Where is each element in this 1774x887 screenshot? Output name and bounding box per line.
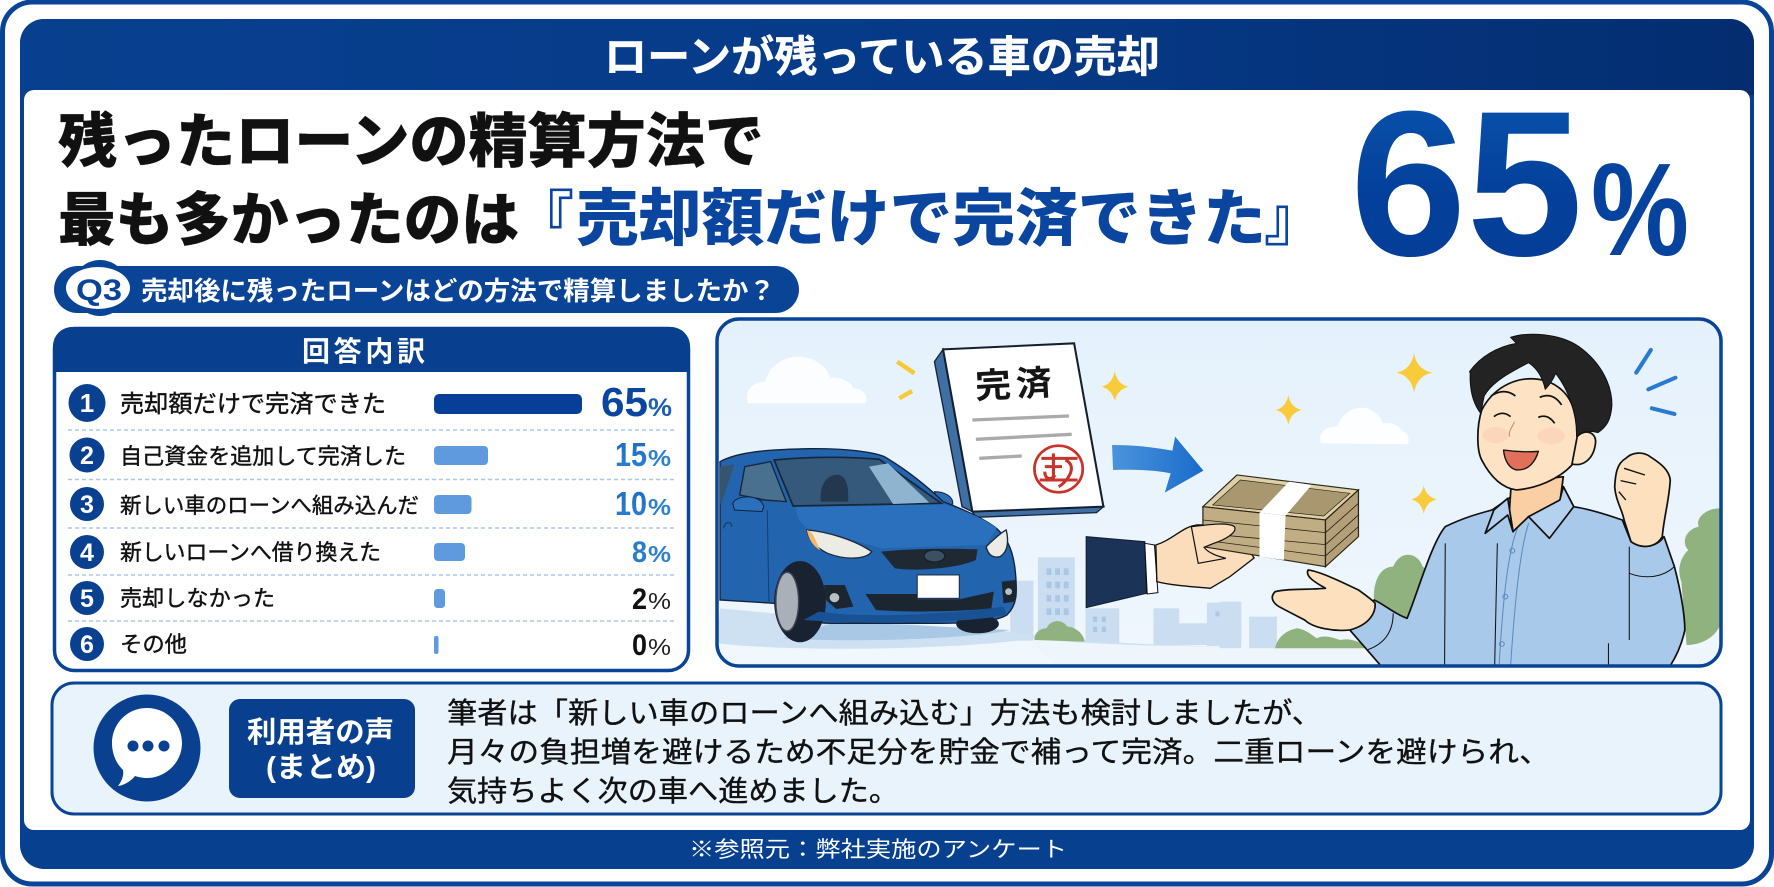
fist <box>1615 453 1670 546</box>
cloud left <box>747 357 866 403</box>
headlights <box>807 530 872 558</box>
row 4 <box>70 535 671 569</box>
footer source note: ※参照元：弊社実施のアンケート <box>689 837 1067 862</box>
grille <box>881 549 978 570</box>
row 6 <box>70 627 671 662</box>
question text: 売却後に残ったローンはどの方法で精算しましたか？ <box>141 276 775 306</box>
row 5: 売却しなかった <box>120 586 275 611</box>
question badge: Q3 <box>76 274 122 307</box>
sparkles <box>1276 353 1437 514</box>
shirt <box>1350 487 1685 670</box>
voice body text: 気持ちよく次の車へ進めました。 <box>447 775 899 808</box>
document <box>934 343 1103 517</box>
big 65 percent: 65 <box>1350 68 1583 299</box>
panel: answer breakdown <box>53 327 690 670</box>
front wheel <box>774 561 826 642</box>
headline highlight: 『 <box>514 186 574 253</box>
mouth <box>1504 450 1538 470</box>
row 1: 65 <box>601 379 648 425</box>
row 3: 3 <box>80 491 94 519</box>
row 6: 0 <box>632 629 647 662</box>
headline <box>58 109 1324 254</box>
row 1: % <box>648 394 672 422</box>
header title: ローンが残っている車の売却 <box>604 34 1160 82</box>
cloud right <box>1320 408 1409 444</box>
suit arm <box>1086 537 1147 608</box>
car <box>720 449 1016 642</box>
header band <box>20 19 1754 95</box>
row 1: 売却額だけで完済できた <box>120 391 386 418</box>
receiving hand <box>1272 570 1375 630</box>
motion lines <box>1636 350 1675 414</box>
buildings right <box>1220 602 1277 648</box>
arrow <box>1112 437 1203 493</box>
row 3 <box>70 485 671 522</box>
panel: user voice <box>52 683 1721 814</box>
hair <box>1470 334 1612 437</box>
big 65 percent: % <box>1591 136 1689 283</box>
table header <box>53 327 690 372</box>
face <box>1478 379 1579 490</box>
collar <box>1485 498 1513 533</box>
panel: illustration <box>717 319 1733 670</box>
row 4: 4 <box>80 539 94 567</box>
city buildings <box>1010 557 1241 646</box>
headline line 2: 最も多かったのは <box>58 188 519 253</box>
licence plate <box>917 575 959 598</box>
question pill <box>54 260 799 316</box>
headline highlight: 売却額だけで完済できた <box>576 185 1266 254</box>
person <box>1272 334 1685 670</box>
big 65 percent <box>1350 68 1689 299</box>
row 3: 新しい車のローンへ組み込んだ <box>120 494 419 518</box>
question badge <box>66 267 130 309</box>
row 2 <box>70 436 671 473</box>
row 4: 8 <box>632 536 647 569</box>
row 5 <box>70 581 671 616</box>
red seal <box>1034 446 1083 492</box>
row 5: 2 <box>632 583 647 616</box>
row 4: 新しいローンへ借り換えた <box>120 540 381 565</box>
headline highlight: 』 <box>1264 186 1324 253</box>
left scene coordinates <box>717 343 1254 668</box>
giving hand <box>1156 525 1254 588</box>
ear <box>1572 432 1596 465</box>
row 6: 6 <box>80 631 94 659</box>
voice badge <box>229 699 415 798</box>
yellow accents <box>897 362 1128 401</box>
row 1: 1 <box>80 388 94 418</box>
row 1 <box>68 379 672 425</box>
row 3: 10 <box>615 485 647 522</box>
thumb over cash <box>1191 524 1235 563</box>
bush <box>1034 621 1084 642</box>
voice body text: 筆者は「新しい車のローンへ組み込む」方法も検討しましたが、 <box>447 697 1322 730</box>
cash stack <box>1203 475 1358 567</box>
table header: 回答内訳 <box>302 336 425 367</box>
row 4: % <box>648 541 671 567</box>
voice badge: (まとめ) <box>266 752 376 784</box>
row 2: 15 <box>615 436 647 473</box>
ground <box>718 608 1218 662</box>
headline line 1: 残ったローンの精算方法で <box>58 109 764 175</box>
neck <box>1509 477 1563 532</box>
row 3: % <box>648 494 671 520</box>
eyes and brows <box>1491 392 1562 423</box>
row 2: % <box>648 445 671 471</box>
document title: 完済 <box>974 364 1057 406</box>
voice body text: 月々の負担増を避けるため不足分を貯金で補って完済。二重ローンを避けられ、 <box>447 736 1550 769</box>
row 5: % <box>648 588 671 614</box>
row 2: 2 <box>80 442 94 470</box>
row 6: % <box>648 634 671 660</box>
row 6: その他 <box>120 632 187 657</box>
voice body text <box>447 697 1550 808</box>
right scene coordinates <box>1203 334 1733 670</box>
icon: speech bubble <box>94 694 200 802</box>
row 5: 5 <box>80 585 94 613</box>
trees <box>1275 508 1720 648</box>
row 2: 自己資金を追加して完済した <box>120 444 406 469</box>
voice badge: 利用者の声 <box>247 716 394 749</box>
